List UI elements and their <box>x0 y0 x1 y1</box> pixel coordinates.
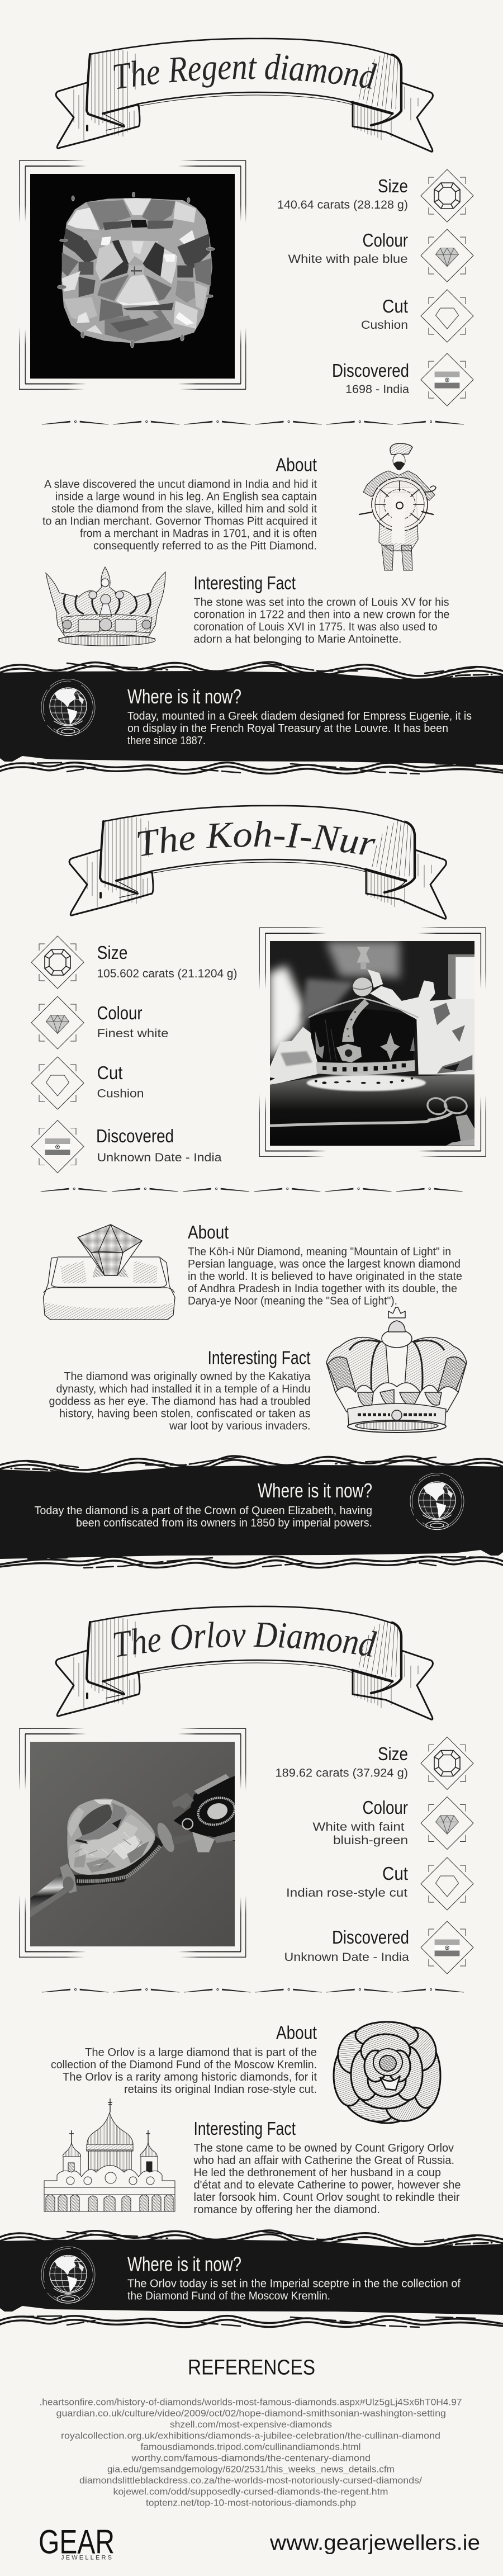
about text: inside a large wound in his leg. An English sea captain <box>55 491 317 503</box>
interesting fact text: The diamond was originally owned by the Kakatiya <box>64 1370 311 1383</box>
stat: cut: Cushion <box>361 319 408 332</box>
stat: size <box>97 942 237 980</box>
stat: colour: Colour <box>362 1797 408 1818</box>
title ribbon: The Regent diamond: The Regent diamond <box>114 54 377 89</box>
icon: colour <box>421 229 473 282</box>
stat: discovered: Discovered <box>96 1126 174 1146</box>
interesting fact text: d'état and to elevate Catherine to power, however she <box>193 2179 461 2191</box>
stat: size: Size <box>378 176 408 196</box>
stat: discovered: 1698 - India <box>345 383 409 396</box>
band: where is it now: Where is it now? <box>258 1479 372 1502</box>
band: where is it now: there since 1887. <box>127 735 206 747</box>
about text: in the world. It is believed to have originated in the state <box>188 1270 462 1283</box>
interesting fact text <box>193 573 449 645</box>
interesting fact text: He led the dethronement of her husband in a coup <box>193 2167 441 2179</box>
title ribbon: The Koh-I-Nur <box>68 805 447 920</box>
about text: About <box>276 454 317 475</box>
icon: globe <box>41 679 95 736</box>
icon: size <box>421 169 473 222</box>
interesting fact text <box>193 2118 461 2216</box>
stat: cut <box>361 296 408 332</box>
band: where is it now: Where is it now? <box>127 685 241 708</box>
photo frame <box>259 927 486 1157</box>
references list: famousdiamonds.tripod.com/cullinandiamonds.html <box>141 2441 361 2452</box>
references list: royalcollection.org.uk/exhibitions/diamonds-a-jubilee-celebration/the-cullinan-diamond <box>61 2430 440 2441</box>
stat: size: 189.62 carats (37.924 g) <box>275 1767 408 1779</box>
icon: India flag <box>31 1121 84 1173</box>
interesting fact text: Interesting Fact <box>208 1348 311 1368</box>
band: where is it now <box>0 1456 503 1568</box>
about text: The Kōh-i Nūr Diamond, meaning "Mountain of Light" in <box>188 1246 451 1258</box>
stat: discovered: Discovered <box>332 360 409 381</box>
logo: GEAR Jewellers: JEWELLERS <box>61 2554 112 2561</box>
icon: colour <box>421 1797 473 1850</box>
stat: cut: Cut <box>97 1062 123 1083</box>
stat: cut: Indian rose-style cut <box>286 1887 407 1899</box>
stat: size <box>275 1743 408 1779</box>
references list: worthy.com/famous-diamonds/the-centenary-diamond <box>131 2452 371 2464</box>
stat: colour: bluish-green <box>333 1834 408 1847</box>
interesting fact text: coronation of Louis XVI in 1775. It was also used to <box>193 621 437 633</box>
icon: size <box>31 936 84 989</box>
section: The Koh-I-Nur <box>0 805 503 1569</box>
interesting fact text: later forsook him. Count Orlov sought to rekindle their <box>193 2191 460 2204</box>
interesting fact text: history, having been stolen, confiscated or taken as <box>59 1408 311 1420</box>
interesting fact text: Interesting Fact <box>193 573 296 593</box>
interesting fact text: The stone was set into the crown of Louis XV for his <box>193 596 449 608</box>
band: where is it now: Today, mounted in a Greek diadem designed for Empress Eugenie, it is <box>127 710 472 722</box>
stat: colour: White with pale blue <box>288 253 408 266</box>
stat: discovered <box>332 360 409 396</box>
title ribbon: The Koh-I-Nur: The Koh-I-Nur <box>137 821 376 856</box>
stat: colour <box>313 1797 408 1847</box>
references list: kojewel.com/odd/supposedly-cursed-diamonds-the-regent.htm <box>113 2486 388 2497</box>
stat: colour: Colour <box>362 230 408 250</box>
about text: Persian language, was once the largest known diamond <box>188 1258 461 1270</box>
stat: discovered: Discovered <box>332 1927 409 1948</box>
about text: consequently referred to as the Pitt Diamond. <box>93 540 317 552</box>
band: where is it now: Where is it now? <box>127 2252 241 2276</box>
icon: size <box>421 1737 473 1789</box>
references list: guardian.co.uk/culture/video/2009/oct/02/hope-diamond-smithsonian-washington-setting <box>56 2408 446 2419</box>
interesting fact text: dynasty, which had installed it in a temple of a Hindu <box>56 1383 311 1396</box>
stat: colour <box>97 1003 169 1040</box>
stat: colour: Colour <box>97 1003 143 1023</box>
icon: cut <box>421 1857 473 1910</box>
stat: cut: Cut <box>382 1863 408 1884</box>
about text <box>188 1222 462 1307</box>
photo frame <box>19 160 246 390</box>
about text <box>51 2022 317 2096</box>
stat: cut: Cushion <box>97 1087 144 1100</box>
interesting fact text: goddess as her eye. The diamond has had a troubled <box>49 1396 311 1408</box>
interesting fact text: who had an affair with Catherine the Great of Russia. <box>193 2154 454 2167</box>
stat: size: Size <box>97 942 127 963</box>
logo: GEAR Jewellers: GEAR <box>39 2523 115 2561</box>
illustration: crown <box>46 567 165 646</box>
interesting fact text: Interesting Fact <box>193 2118 296 2139</box>
about text: A slave discovered the uncut diamond in India and hid it <box>44 479 317 491</box>
icon: India flag <box>421 1921 473 1974</box>
illustration: royal crown <box>326 1307 467 1433</box>
about text: from a merchant in Madras in 1701, and it is often <box>80 528 317 540</box>
stat: size: 105.602 carats (21.1204 g) <box>97 967 237 980</box>
section: The Regent diamond <box>0 38 503 775</box>
title ribbon: The Orlov Diamond <box>55 1606 434 1721</box>
band: where is it now: the Diamond Fund of the Moscow Kremlin. <box>127 2290 330 2303</box>
illustration: diamond on box <box>44 1225 175 1320</box>
band: where is it now: Today the diamond is a part of the Crown of Queen Elizabeth, having <box>35 1505 372 1517</box>
stat: colour: White with faint <box>313 1821 405 1833</box>
website address: www.gearjewellers.ie <box>269 2531 480 2555</box>
about text: stole the diamond from the slave, killed him and sold it <box>51 503 317 516</box>
photo: Regent diamond on black <box>30 174 235 379</box>
about text: to an Indian merchant. Governor Thomas Pitt acquired it <box>42 516 317 528</box>
references list: .heartsonfire.com/history-of-diamonds/worlds-most-famous-diamonds.aspx#Ulz5gLj4Sx6hT0H4.97 <box>39 2397 462 2408</box>
interesting fact text: romance by offering her the diamond. <box>193 2204 380 2216</box>
illustration: rose <box>331 2021 446 2131</box>
illustration: sailor at ship wheel <box>359 443 436 570</box>
title ribbon: The Regent diamond <box>55 38 434 153</box>
about text: collection of the Diamond Fund of the Moscow Kremlin. <box>51 2059 317 2071</box>
stat: cut <box>286 1863 408 1899</box>
band: where is it now: The Orlov today is set in the Imperial sceptre in the the collection of <box>127 2278 461 2290</box>
stat: size: 140.64 carats (28.128 g) <box>277 198 408 211</box>
stat: discovered <box>284 1927 409 1964</box>
about text: of Andhra Pradesh in India together with its double, the <box>188 1283 457 1295</box>
stat: colour <box>288 230 408 266</box>
band: where is it now: on display in the French Royal Treasury at the Louvre. It has been <box>127 722 448 735</box>
interesting fact text: war loot by various invaders. <box>169 1420 311 1433</box>
band: where is it now <box>0 2230 503 2327</box>
icon: globe <box>410 1473 464 1530</box>
stat: size <box>277 176 408 211</box>
interesting fact text: adorn a hat belonging to Marie Antoinette. <box>193 633 401 645</box>
icon: cut <box>31 1057 84 1109</box>
photo: Orlov diamond in sceptre <box>29 1742 238 1946</box>
about text: About <box>188 1222 229 1242</box>
interesting fact text: coronation in 1722 and then into a new crown for the <box>193 608 449 621</box>
title ribbon: The Orlov Diamond: The Orlov Diamond <box>114 1622 377 1657</box>
photo: Koh-I-Nur crown on cushion <box>269 941 475 1146</box>
about text: The Orlov is a rarity among historic diamonds, for it <box>63 2071 317 2083</box>
references list: gia.edu/gemsandgemology/620/2531/this_weeks_news_details.cfm <box>107 2464 395 2475</box>
icon: India flag <box>421 353 473 406</box>
stat: colour: Finest white <box>97 1027 169 1040</box>
stat: cut: Cut <box>382 296 408 316</box>
band: where is it now: been confiscated from its owners in 1850 by imperial powers. <box>76 1517 372 1529</box>
stat: discovered: Unknown Date - India <box>97 1151 222 1164</box>
about text: Darya-ye Noor (meaning the "Sea of Light"). <box>188 1295 397 1307</box>
stat: discovered: Unknown Date - India <box>284 1951 409 1964</box>
icon: colour <box>31 996 84 1049</box>
stat: size: Size <box>378 1743 408 1764</box>
stat: cut <box>97 1062 144 1100</box>
icon: cut <box>421 290 473 342</box>
photo frame <box>19 1728 246 1958</box>
references list: toptenz.net/top-10-most-notorious-diamonds.php <box>146 2497 356 2508</box>
band: where is it now <box>0 662 503 774</box>
about text: About <box>276 2022 317 2043</box>
references list <box>39 2397 462 2508</box>
references list: shzell.com/most-expensive-diamonds <box>170 2419 332 2430</box>
about text: The Orlov is a large diamond that is part of the <box>85 2046 317 2059</box>
about text <box>42 454 317 552</box>
illustration: Russian church <box>44 2098 175 2211</box>
about text: retains its original Indian rose-style cut. <box>124 2083 317 2096</box>
interesting fact text <box>49 1348 311 1433</box>
references heading: REFERENCES <box>188 2356 315 2380</box>
interesting fact text: The stone came to be owned by Count Grigory Orlov <box>193 2142 454 2154</box>
references list: diamondslittleblackdress.co.za/the-worlds-most-notoriously-cursed-diamonds/ <box>79 2475 422 2486</box>
section: The Orlov Diamond <box>0 1606 503 2328</box>
stat: discovered <box>96 1126 222 1164</box>
icon: globe <box>41 2247 95 2303</box>
